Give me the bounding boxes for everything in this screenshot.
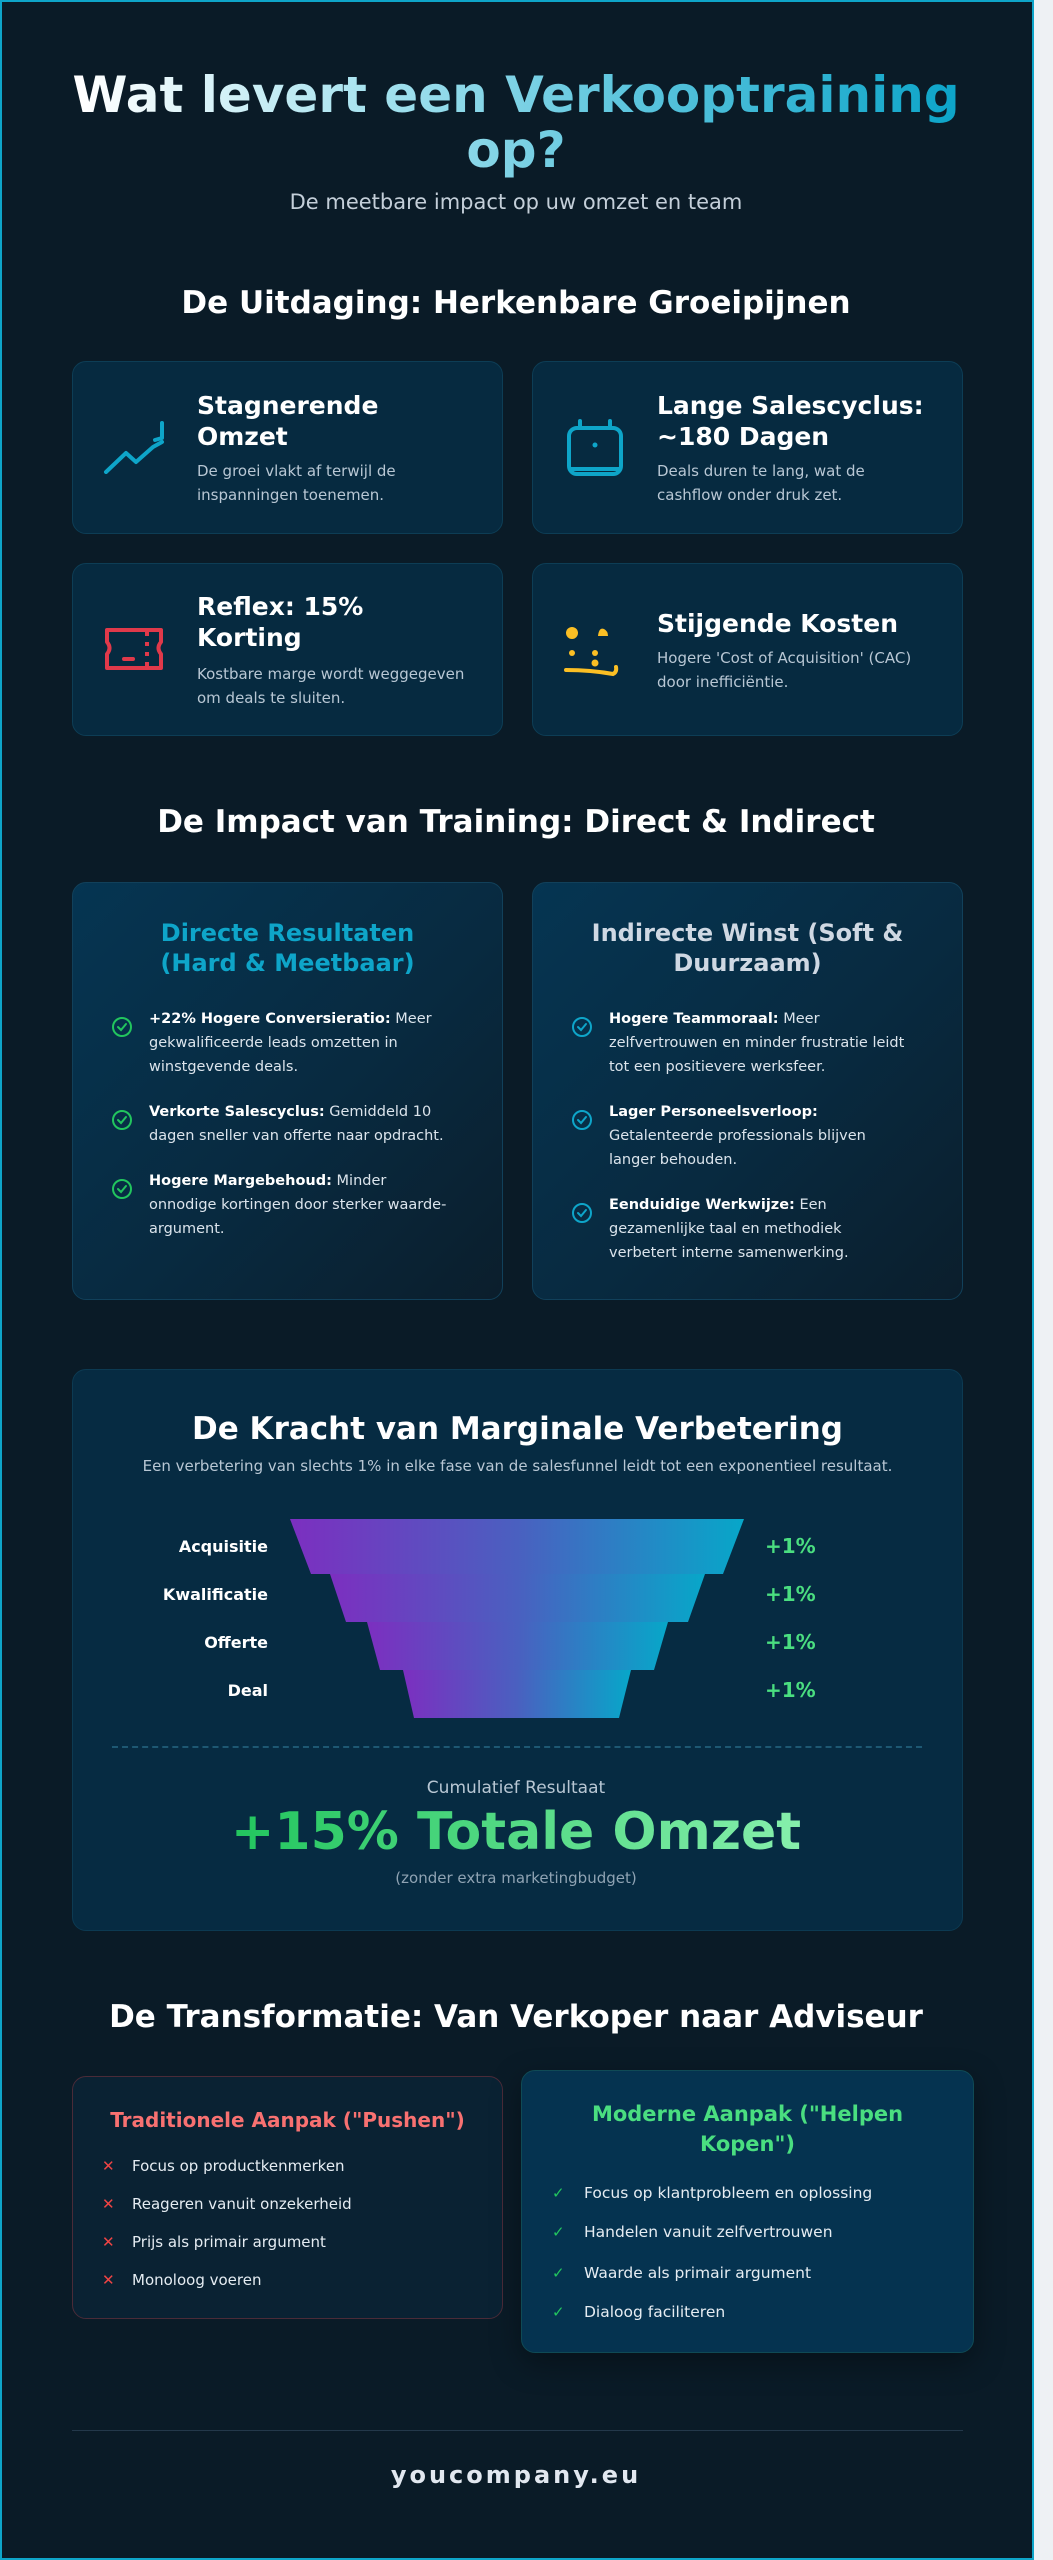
panel: marginale verbetering: [72, 1369, 963, 1931]
card text: [197, 462, 396, 504]
icon: ticket: [105, 628, 163, 670]
card title: [197, 592, 363, 652]
card: stijgende kosten: [532, 563, 963, 736]
icon: calendar: [567, 419, 623, 476]
funnel chart: +1%: [765, 1534, 816, 1558]
card title: [657, 391, 924, 451]
card text: Deals duren te lang, wat de: [657, 462, 865, 480]
item 2: Verkorte Salescyclus: Gemiddeld 10: [149, 1104, 431, 1120]
card title: Stijgende Kosten: [657, 609, 898, 638]
item 3: [572, 1197, 849, 1261]
item 1: +22% Hogere Conversieratio: Meer: [149, 1011, 432, 1027]
subtitle: De meetbare impact op uw omzet en team: [290, 190, 742, 214]
list: Reageren vanuit onzekerheid: [132, 2195, 352, 2213]
card text: om deals te sluiten.: [197, 689, 345, 707]
card text: Kostbare marge wordt weggegeven: [197, 665, 464, 683]
heading: transformatie: De Transformatie: Van Verkoper naar Adviseur: [109, 1999, 923, 2035]
list: [552, 2184, 872, 2321]
panel: indirecte winst: [532, 882, 963, 1300]
panel: directe resultaten: [72, 882, 503, 1300]
item 1: tot een positievere werksfeer.: [609, 1059, 825, 1075]
card title: [197, 391, 378, 451]
card text: cashflow onder druk zet.: [657, 486, 842, 504]
item 1: [112, 1011, 432, 1075]
list: Prijs als primair argument: [132, 2233, 326, 2251]
funnel chart: Offerte: [204, 1633, 268, 1652]
item 1: winstgevende deals.: [149, 1059, 298, 1075]
icon: trending line: [104, 421, 164, 474]
item 1: gekwalificeerde leads omzetten in: [149, 1035, 398, 1051]
card text: inspanningen toenemen.: [197, 486, 384, 504]
list: Focus op productkenmerken: [132, 2157, 345, 2175]
funnel chart: Deal: [228, 1681, 268, 1700]
card title: ~180 Dagen: [657, 422, 829, 451]
item 3: Hogere Margebehoud: Minder: [149, 1173, 386, 1189]
list: [102, 2157, 352, 2289]
panel heading: (Hard & Meetbaar): [160, 949, 415, 977]
title: [0, 68, 1032, 178]
panel heading: Directe Resultaten: [161, 919, 414, 947]
panel heading: [592, 2102, 903, 2156]
card text: [657, 649, 911, 691]
funnel chart: Kwalificatie: [163, 1585, 268, 1604]
item 2: [572, 1104, 866, 1168]
panel heading: Duurzaam): [673, 949, 822, 977]
list: Dialoog faciliteren: [584, 2303, 725, 2321]
card text: Hogere 'Cost of Acquisition' (CAC): [657, 649, 911, 667]
card title: Reflex: 15%: [197, 592, 363, 621]
item 1: zelfvertrouwen en minder frustratie leidt: [609, 1035, 904, 1051]
panel heading: Indirecte Winst (Soft &: [592, 919, 903, 947]
card title: Omzet: [197, 422, 288, 451]
result note: (zonder extra marketingbudget): [395, 1869, 637, 1887]
item 2: langer behouden.: [609, 1152, 737, 1168]
title: op?: [466, 121, 566, 179]
heading: impact: De Impact van Training: Direct & Indirect: [157, 804, 875, 840]
card title: Lange Salescyclus:: [657, 391, 924, 420]
item 3: verbetert interne samenwerking.: [609, 1245, 849, 1261]
dashed divider: [112, 1746, 922, 1748]
list: ✓: [552, 2303, 565, 2321]
funnel chart: +1%: [765, 1582, 816, 1606]
funnel chart: +1%: [765, 1630, 816, 1654]
item 3: argument.: [149, 1221, 225, 1237]
card title: Stagnerende: [197, 391, 378, 420]
list: Waarde als primair argument: [584, 2264, 811, 2282]
funnel chart: [163, 1519, 816, 1718]
panel heading: [592, 919, 903, 977]
card text: door inefficiëntie.: [657, 673, 788, 691]
list: Focus op klantprobleem en oplossing: [584, 2184, 872, 2202]
card: lange salescyclus: [532, 361, 963, 534]
title: Wat levert een Verkooptraining: [72, 66, 960, 124]
list: ✓: [552, 2223, 565, 2241]
list: Monoloog voeren: [132, 2271, 261, 2289]
list: Handelen vanuit zelfvertrouwen: [584, 2223, 833, 2241]
item 3: Eenduidige Werkwijze: Een: [609, 1197, 827, 1213]
card text: [657, 462, 865, 504]
item 3: onnodige kortingen door sterker waarde-: [149, 1197, 446, 1213]
panel subtitle: Een verbetering van slechts 1% in elke fase van de salesfunnel leidt tot een exponentieel resultaat.: [143, 1457, 892, 1475]
item 2: Getalenteerde professionals blijven: [609, 1128, 866, 1144]
panel heading: Moderne Aanpak ("Helpen: [592, 2102, 903, 2126]
funnel chart: +1%: [765, 1678, 816, 1702]
card title: Korting: [197, 623, 302, 652]
big result: +15% Totale Omzet: [231, 1802, 801, 1862]
card text: [197, 665, 464, 707]
panel: traditionele aanpak: [72, 2076, 503, 2319]
list: ✓: [552, 2264, 565, 2282]
card: reflex korting: [72, 563, 503, 736]
list: ✓: [552, 2184, 565, 2202]
icon: coins: [564, 627, 618, 676]
funnel chart: Acquisitie: [179, 1537, 268, 1556]
panel heading: De Kracht van Marginale Verbetering: [192, 1411, 843, 1447]
item 2: Lager Personeelsverloop:: [609, 1104, 818, 1120]
panel heading: Kopen"): [700, 2132, 795, 2156]
item 3: [112, 1173, 446, 1237]
list: ✕: [102, 2195, 115, 2213]
card: stagnerende omzet: [72, 361, 503, 534]
list: ✕: [102, 2271, 115, 2289]
panel: moderne aanpak: [521, 2070, 974, 2353]
card text: De groei vlakt af terwijl de: [197, 462, 396, 480]
item 2: [112, 1104, 444, 1144]
result label: Cumulatief Resultaat: [427, 1778, 605, 1798]
item 3: gezamenlijke taal en methodiek: [609, 1221, 842, 1237]
panel heading: Traditionele Aanpak ("Pushen"): [110, 2108, 465, 2132]
list: ✕: [102, 2157, 115, 2175]
list: ✕: [102, 2233, 115, 2251]
item 2: dagen sneller van offerte naar opdracht.: [149, 1128, 444, 1144]
panel heading: [160, 919, 415, 977]
item 1: Hogere Teammoraal: Meer: [609, 1011, 820, 1027]
footer brand: youcompany.eu: [391, 2461, 641, 2489]
heading: uitdaging: De Uitdaging: Herkenbare Groeipijnen: [181, 285, 851, 321]
item 1: [572, 1011, 904, 1075]
